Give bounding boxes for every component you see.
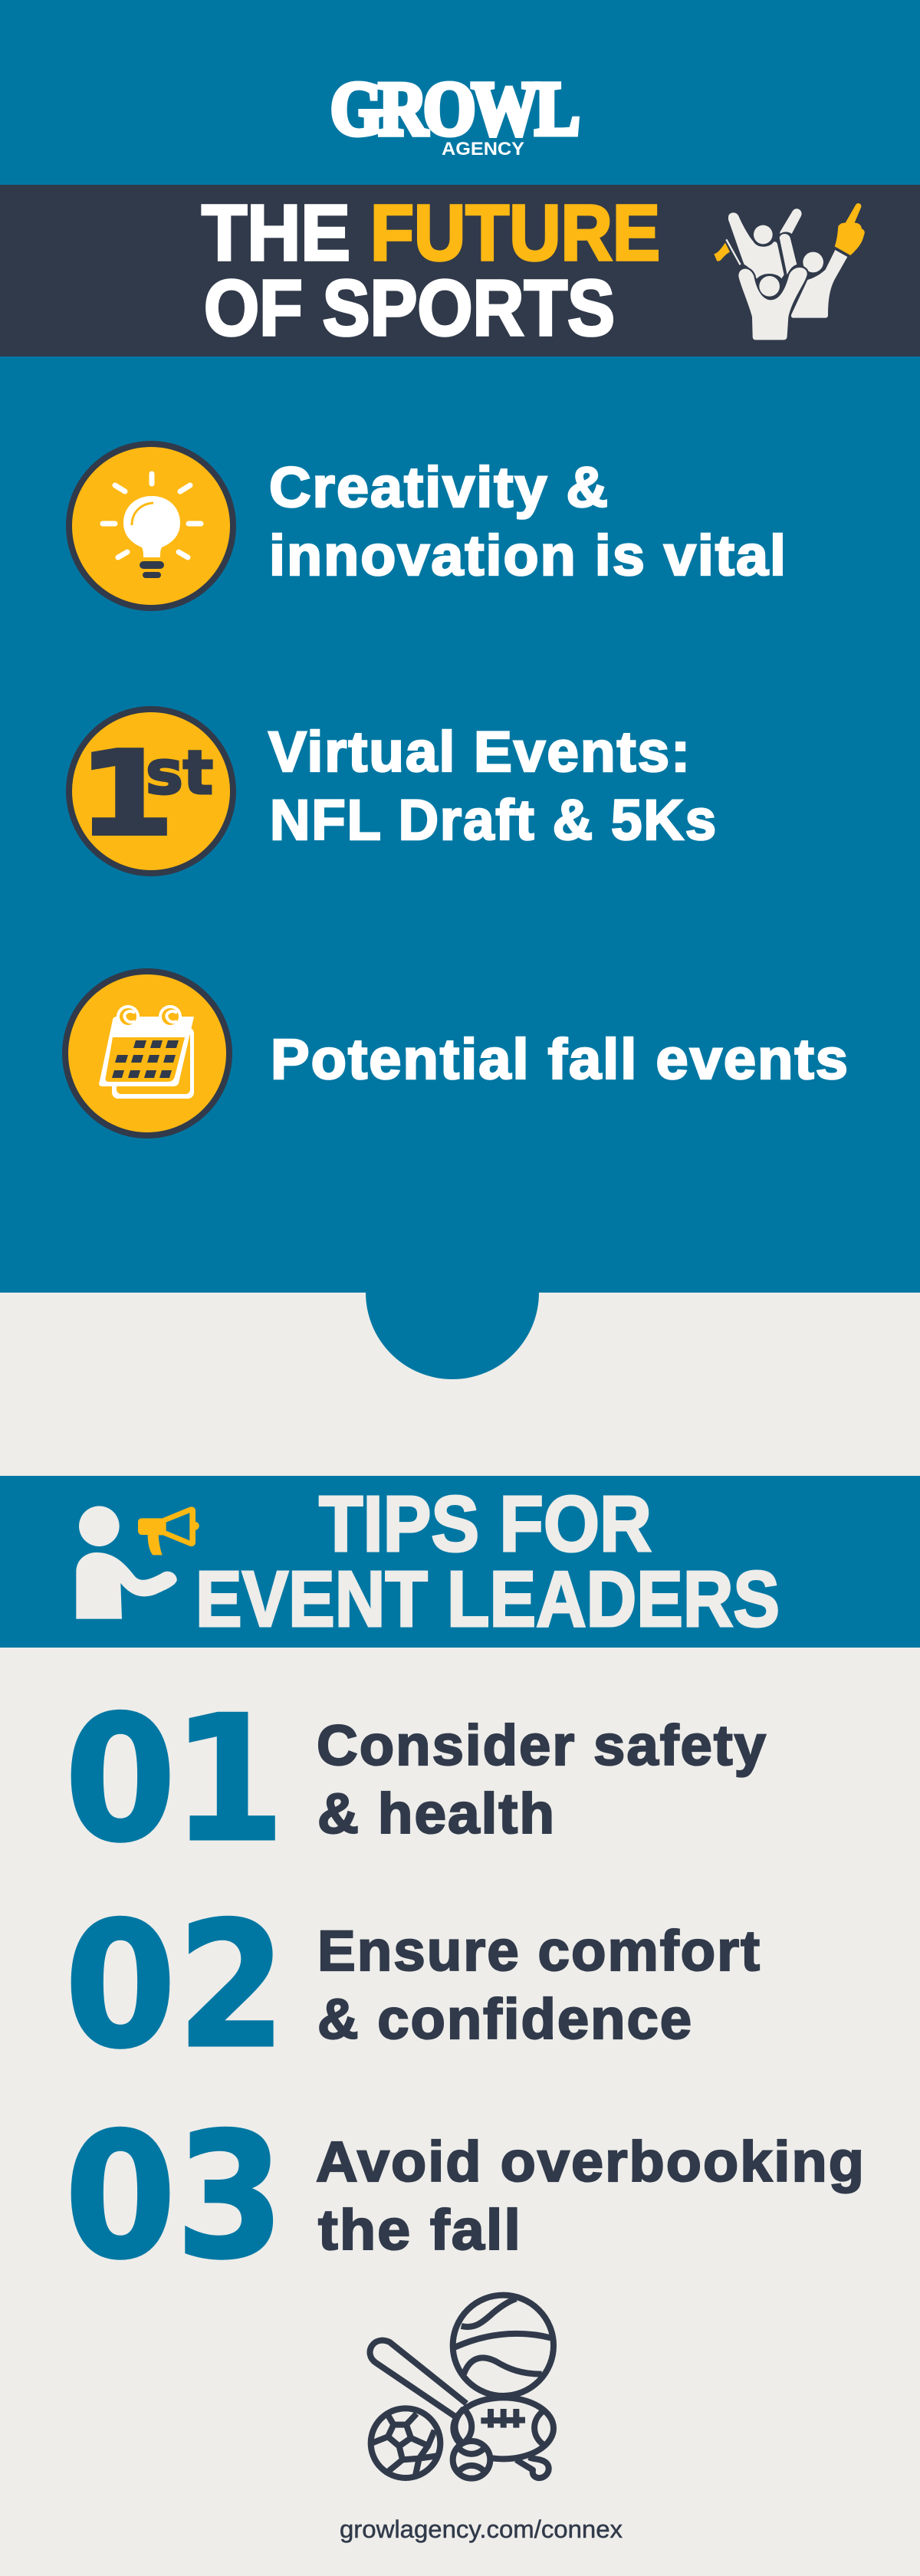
text: ensure comfort: Ensure comfort: [317, 1919, 761, 1983]
text: website url: growlagency.com/connex: [340, 2515, 623, 2543]
point two: virtual events: [69, 709, 718, 873]
icon: calendar: [65, 971, 229, 1135]
text: virtual events line one: Virtual Events:: [268, 720, 692, 784]
panel: tips heading band: [0, 1476, 920, 1648]
text: creativity line one: Creativity &: [269, 455, 610, 519]
text: and health: & health: [317, 1782, 556, 1845]
title line one: THE: [202, 189, 350, 277]
logo: Growl wordmark: GROWL: [330, 66, 577, 151]
number 02: 2: [177, 1885, 286, 2087]
number 02: 0: [64, 1885, 176, 2087]
text: creativity line two: innovation is vital: [269, 524, 787, 587]
text: consider safety: Consider safety: [317, 1714, 767, 1777]
text: and confidence: & confidence: [317, 1987, 693, 2051]
point one: creativity: [69, 444, 787, 608]
number 01: 0: [64, 1679, 176, 1881]
text: virtual events line two: NFL Draft & 5Ks: [270, 788, 718, 852]
heading line one: TIPS FOR: [319, 1480, 652, 1568]
number 03: 3: [176, 2096, 284, 2298]
icon: first place badge: 1: [77, 726, 175, 862]
heading line two: EVENT LEADERS: [196, 1555, 780, 1643]
number 03: [64, 2096, 284, 2298]
tip two: [64, 1885, 761, 2087]
text: potential fall events: Potential fall events: [271, 1027, 849, 1091]
icon: first place badge: st: [146, 739, 213, 808]
panel: title band: [0, 185, 920, 356]
title line one: FUTURE: [370, 189, 660, 277]
number 01: 1: [172, 1679, 285, 1881]
number 02: [64, 1885, 286, 2087]
icon: person with megaphone: [76, 1506, 199, 1619]
point three: fall events: [65, 971, 849, 1135]
tip one: [64, 1679, 767, 1881]
text: avoid overbooking: Avoid overbooking: [316, 2130, 866, 2193]
logo: Agency subline: AGENCY: [442, 139, 524, 159]
text: the fall: the fall: [318, 2198, 522, 2262]
icon: first place badge: [69, 709, 233, 873]
icon: light bulb: [69, 444, 233, 608]
panel: logo header: [0, 0, 920, 185]
icon: sports equipment: [370, 2295, 554, 2479]
icon: cheering fans: [714, 203, 865, 340]
number 03: 0: [64, 2096, 176, 2298]
panel: key points: [0, 356, 920, 1379]
tip three: [64, 2096, 866, 2298]
title line two: OF SPORTS: [204, 264, 615, 352]
number 01: [64, 1679, 285, 1881]
